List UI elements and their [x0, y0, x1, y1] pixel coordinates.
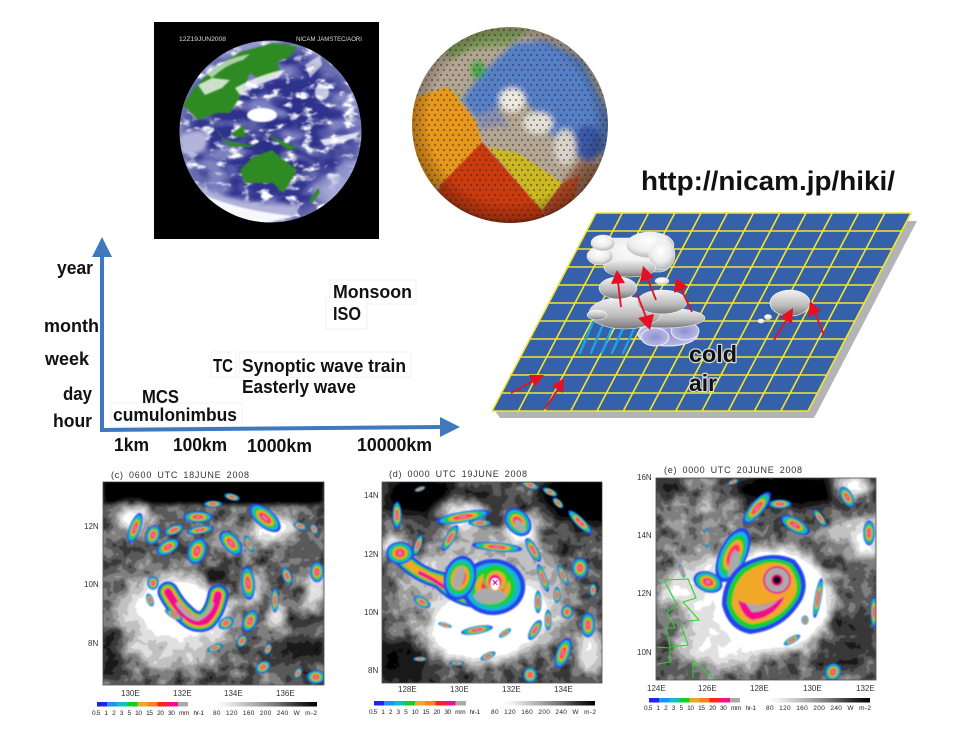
map e axis labels	[637, 473, 875, 693]
map e axis labels: 12N	[637, 589, 652, 598]
red wind arrows	[511, 266, 824, 409]
map d legend bars: 80 120 160 200 240 W m-2	[491, 709, 596, 716]
time axis labels: year	[57, 258, 93, 278]
map d field	[382, 482, 602, 683]
map d axis labels: 12N	[364, 550, 379, 559]
cold pool cloud	[638, 322, 699, 346]
map d axis labels: 130E	[450, 685, 469, 694]
map e axis labels: 16N	[637, 473, 652, 482]
phenomenon label backgrounds	[111, 280, 416, 427]
panel: icosahedral mesh globe	[412, 27, 608, 223]
panel: model grid with clouds	[492, 213, 917, 418]
phenomena labels: Monsoon	[333, 282, 412, 302]
map c axis labels: 130E	[121, 689, 140, 698]
map e legend bars: 80 120 160 200 240 W m-2	[766, 705, 871, 712]
panel: typhoon map d	[364, 470, 602, 714]
map d legend bars: 0.5 1 2 3 5 10 15 20 30 mm hr-1	[369, 709, 480, 716]
length axis labels: 1000km	[247, 436, 312, 456]
map c legend bars: 80 120 160 200 240 W m-2	[213, 710, 317, 717]
map c axis labels: 132E	[173, 689, 192, 698]
rain streaks	[580, 322, 637, 353]
map c axis labels	[84, 522, 295, 698]
cold air label: cold	[689, 341, 737, 367]
time axis labels: day	[63, 384, 92, 404]
phenomena labels: Easterly wave	[242, 377, 356, 397]
url heading: http://nicam.jp/hiki/	[641, 166, 896, 196]
map d axis labels: 10N	[364, 608, 379, 617]
map c axis labels: 134E	[224, 689, 243, 698]
map e axis labels: 10N	[637, 648, 652, 657]
phenomena labels: ISO	[333, 304, 361, 324]
phenomena labels: TC	[213, 356, 233, 376]
length axis labels: 1km	[114, 435, 149, 455]
chart: space-time scale diagram	[44, 237, 460, 456]
map d legend bars	[369, 701, 596, 716]
panel: NICAM satellite-like globe	[154, 22, 379, 239]
panel: typhoon map c	[84, 470, 330, 717]
length axis labels: 100km	[173, 435, 227, 455]
map e title: (e) 0000 UTC 20JUNE 2008	[664, 465, 802, 475]
length axis labels	[114, 435, 432, 456]
map c legend bars: 0.5 1 2 3 5 10 15 20 30 mm hr-1	[92, 710, 204, 717]
grid shadow	[495, 221, 917, 418]
horizontal length axis	[100, 427, 442, 430]
green coastlines	[656, 579, 713, 678]
map c field	[98, 478, 330, 685]
small cumulus cloud	[758, 290, 810, 323]
blue grid plane	[492, 213, 911, 411]
map e legend bars	[644, 698, 871, 712]
map d axis labels: 134E	[554, 685, 573, 694]
map d axis labels	[364, 491, 573, 694]
map e axis labels: 130E	[803, 684, 822, 693]
time axis labels: month	[44, 316, 99, 336]
map e axis labels: 14N	[637, 531, 652, 540]
earth disc	[179, 40, 363, 226]
map c axis labels: 8N	[88, 639, 98, 648]
storm centre marker d: ×	[492, 578, 498, 589]
map e legend bars: 0.5 1 2 3 5 10 15 20 30 mm hr-1	[644, 705, 756, 712]
phenomena labels	[113, 282, 412, 425]
time axis labels	[44, 258, 99, 431]
map c axis labels: 136E	[276, 689, 295, 698]
map d axis labels: 132E	[502, 685, 521, 694]
map c title: (c) 0600 UTC 18JUNE 2008	[111, 470, 249, 480]
time axis labels: hour	[53, 411, 92, 431]
phenomena labels: cumulonimbus	[113, 405, 237, 425]
time axis labels: week	[44, 349, 90, 369]
phenomena labels: Synoptic wave train	[242, 356, 406, 376]
panel: typhoon map e	[637, 465, 881, 712]
cold air label: air	[689, 370, 717, 396]
map e axis labels: 126E	[698, 684, 717, 693]
cold air label	[689, 341, 737, 396]
map e axis labels: 132E	[856, 684, 875, 693]
phenomena labels: MCS	[142, 387, 179, 407]
map d axis labels: 128E	[398, 685, 417, 694]
map d axis labels: 8N	[368, 666, 378, 675]
map e field	[654, 474, 881, 684]
vertical time axis	[100, 255, 104, 431]
map e axis labels: 128E	[750, 684, 769, 693]
map c axis labels: 12N	[84, 522, 99, 531]
cumulonimbus cloud	[587, 232, 705, 329]
map e axis labels: 124E	[647, 684, 666, 693]
map c axis labels: 10N	[84, 580, 99, 589]
map c legend bars	[92, 702, 317, 717]
length axis labels: 10000km	[357, 435, 432, 455]
map d title: (d) 0000 UTC 19JUNE 2008	[389, 469, 527, 479]
map d axis labels: 14N	[364, 491, 379, 500]
globe date caption: 12Z19JUN2008	[179, 36, 226, 43]
globe source caption: NICAM JAMSTEC/AORI	[296, 36, 362, 43]
yellow grid lines	[492, 213, 911, 411]
